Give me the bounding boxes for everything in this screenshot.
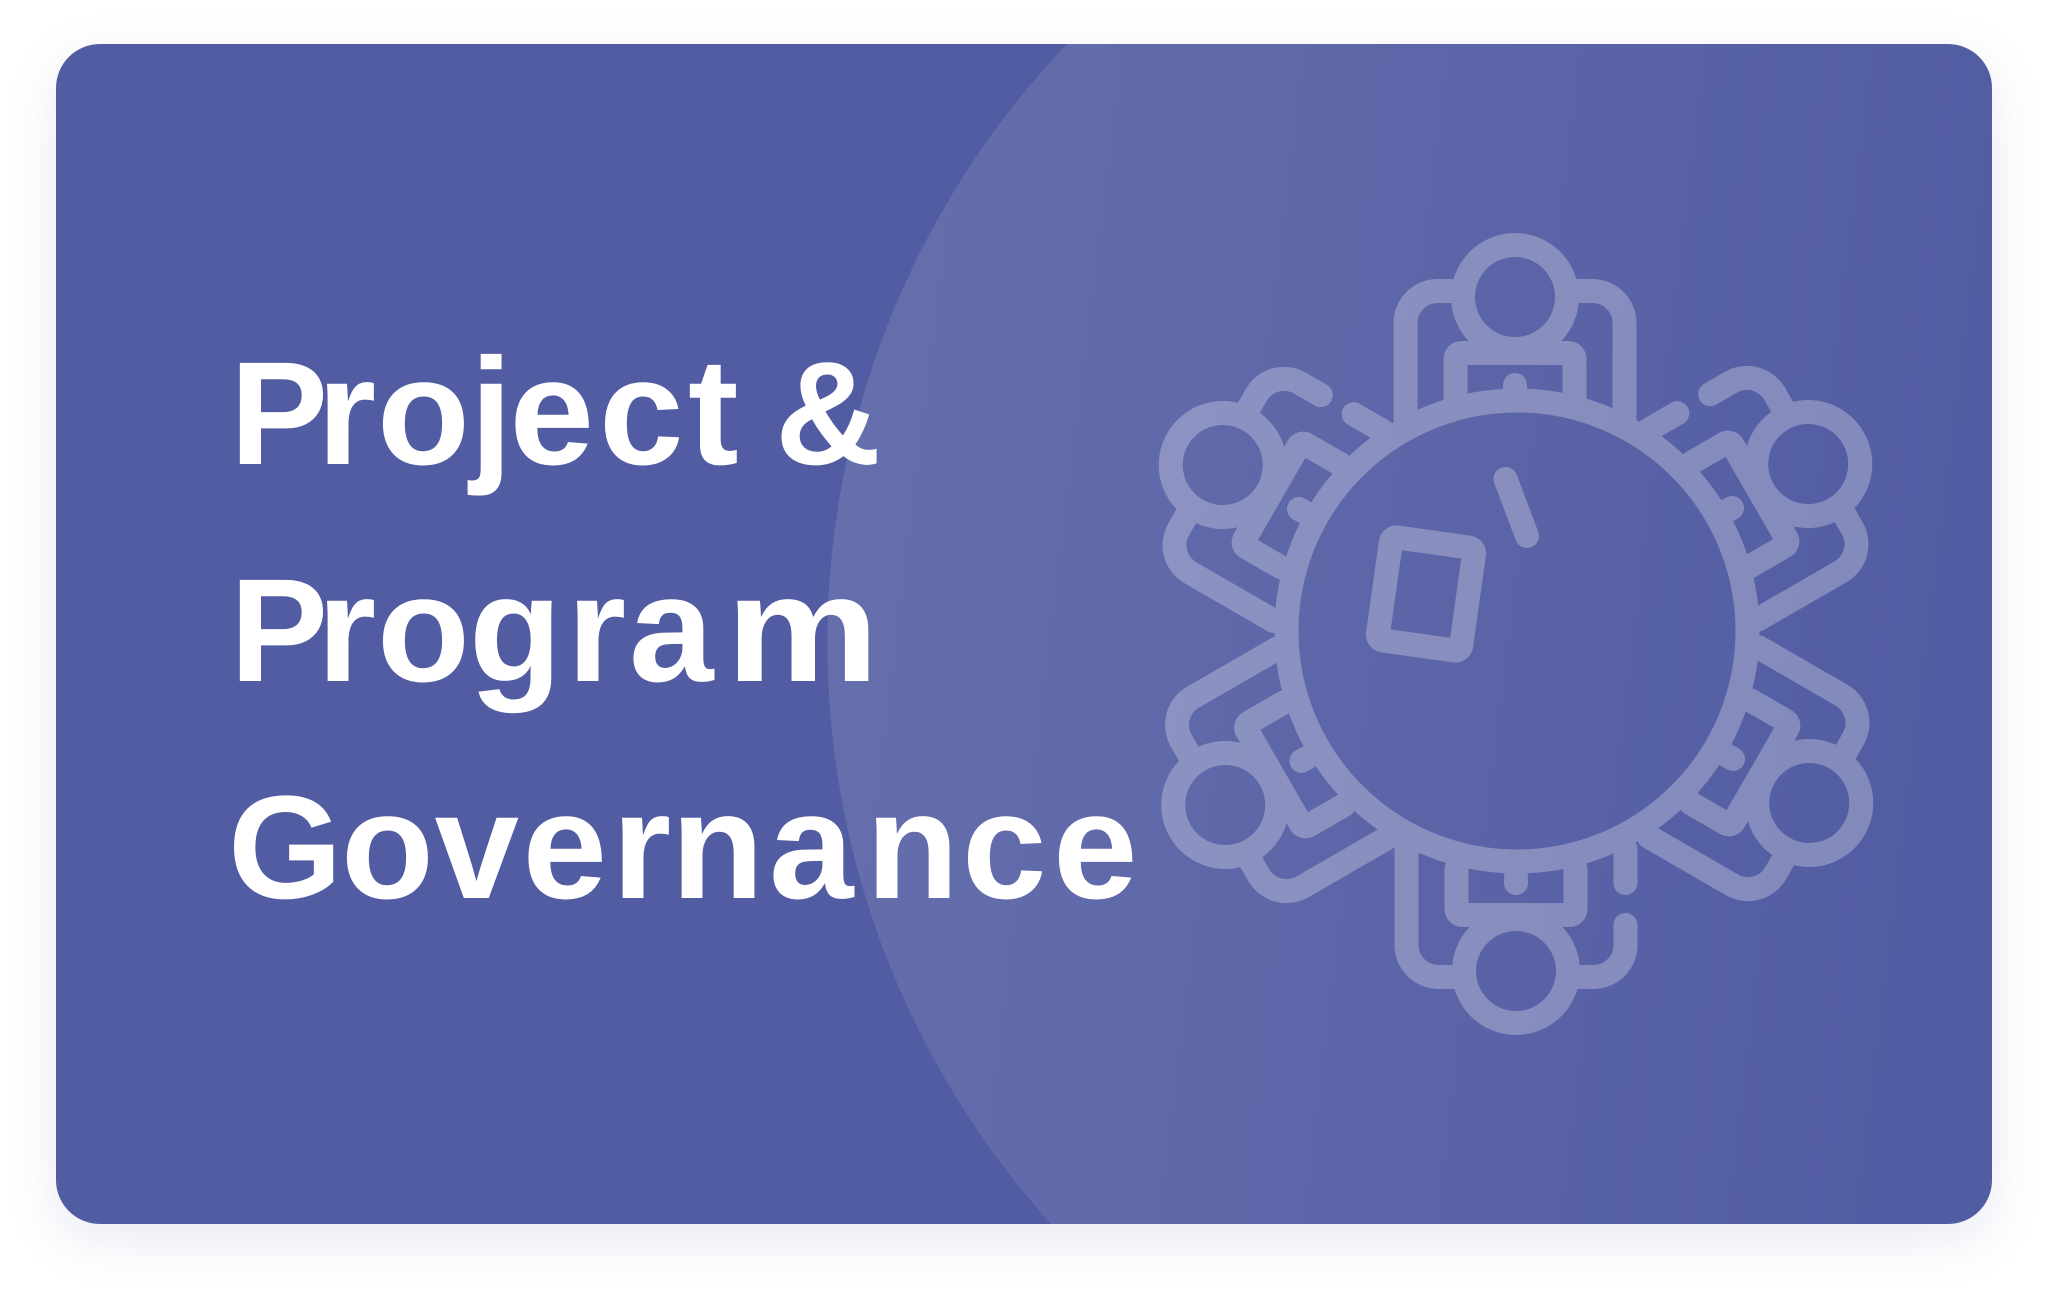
person: upper right bbox=[1648, 343, 1908, 620]
title line: Program: rogra bbox=[317, 544, 715, 714]
title line: Program: P bbox=[230, 549, 328, 713]
person: upper left bbox=[1123, 344, 1383, 621]
title line: Project &: & bbox=[775, 332, 881, 496]
tablet on table bbox=[1377, 537, 1475, 651]
title line: Governance: overnance bbox=[341, 761, 1138, 931]
person: bottom bbox=[1406, 849, 1626, 1023]
title bbox=[228, 327, 1138, 931]
title line: Project &: P bbox=[230, 332, 328, 496]
table bbox=[1286, 400, 1748, 862]
person: top bbox=[1406, 245, 1624, 419]
icon: meeting table with six people bbox=[1123, 245, 1909, 1023]
title line: Program: m bbox=[726, 544, 879, 714]
large lighter circle bbox=[827, 44, 1992, 1224]
pen on table bbox=[1506, 479, 1527, 536]
title line: Project &: roject bbox=[317, 327, 802, 497]
person: lower right bbox=[1649, 647, 1909, 924]
title line: Governance: G bbox=[228, 766, 342, 930]
person: lower left bbox=[1125, 649, 1386, 926]
